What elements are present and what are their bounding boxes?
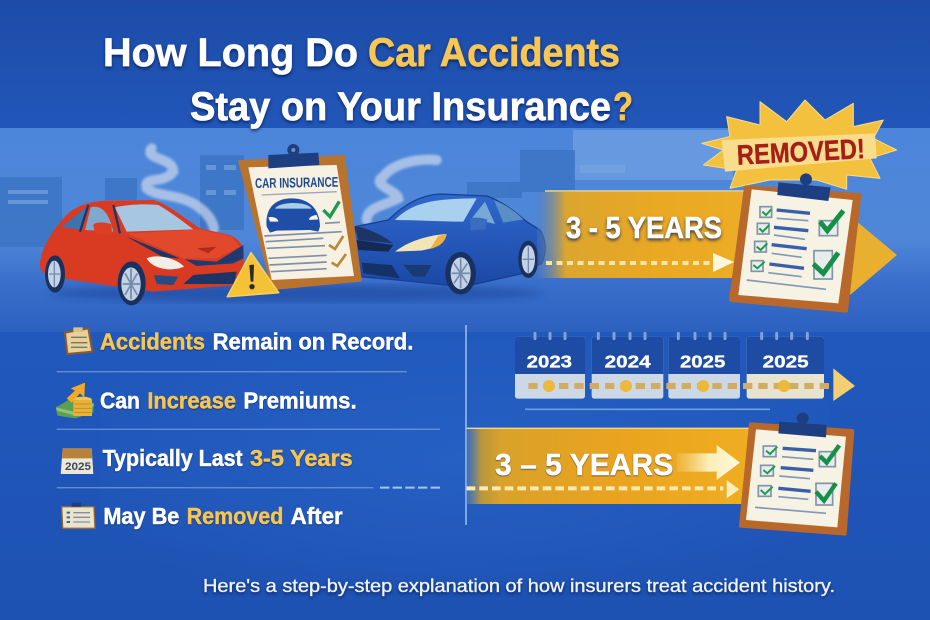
item: accidents: Remain on Record. [213, 328, 413, 354]
removed label: REMOVED! [736, 133, 866, 171]
timeline calendars [515, 333, 855, 409]
dashed arrow [546, 253, 734, 272]
item: typically last [103, 445, 353, 471]
calendar 2024: 2024 [605, 351, 651, 371]
blue car [355, 194, 545, 295]
orange arrow banner [537, 191, 897, 295]
item: premiums: Can [100, 387, 140, 413]
icon: checklist [62, 503, 95, 528]
road shadow [50, 285, 543, 302]
item: accidents [100, 328, 413, 354]
item: premiums: Premiums. [243, 387, 357, 413]
lower arrow [677, 445, 740, 480]
illustration: car accident scene [40, 144, 545, 305]
removed starburst [702, 100, 897, 189]
calendar 2025 second: 2025 [763, 351, 809, 371]
smoke [146, 148, 437, 228]
title: Stay on Your Insurance [190, 85, 611, 129]
calendar 2024 [592, 333, 663, 399]
calendar 2025: 2025 [680, 351, 726, 371]
calendar 2025 [668, 333, 740, 399]
calendar 2023 [515, 333, 585, 399]
clipboard: lower checklist [741, 412, 853, 534]
title: ? [613, 85, 633, 129]
calendar 2023: 2023 [527, 351, 572, 371]
timeline dots and arrow [528, 368, 855, 401]
icon: notes [65, 327, 92, 354]
icon: calendar 2025 [61, 448, 93, 474]
clipboard: car insurance [240, 144, 360, 288]
icon: money and arrow [56, 383, 94, 418]
icon: calendar 2025: 2025 [65, 461, 91, 473]
red car [40, 200, 244, 305]
item: may be removed: After [291, 503, 343, 529]
item: may be removed: May Be [103, 503, 179, 529]
clipboard: removed checklist [731, 173, 859, 311]
item: typically last: Typically Last [103, 445, 243, 471]
item: accidents: Accidents [100, 328, 205, 354]
lower orange banner [467, 412, 853, 534]
footer caption: Here's a step-by-step explanation of how insurers treat accident history. [203, 576, 835, 596]
item: premiums: Increase [147, 387, 236, 413]
item: premiums [100, 387, 357, 413]
lower label: 3 – 5 YEARS [495, 448, 673, 482]
title [103, 31, 633, 129]
icon: warning triangle [227, 253, 279, 297]
calendar 2025 second [747, 333, 824, 399]
item: may be removed: Removed [187, 503, 283, 529]
item: may be removed [103, 503, 343, 529]
label: 3-5 years: 3 - 5 YEARS [566, 210, 722, 245]
list: key facts [56, 327, 440, 529]
title: Car Accidents [368, 31, 620, 75]
title: How Long Do [103, 31, 358, 75]
clipboard: car insurance: CAR INSURANCE [255, 174, 338, 191]
vertical divider [465, 325, 467, 525]
lower dashed arrow [467, 480, 739, 498]
item: typically last: 3-5 Years [250, 445, 353, 471]
